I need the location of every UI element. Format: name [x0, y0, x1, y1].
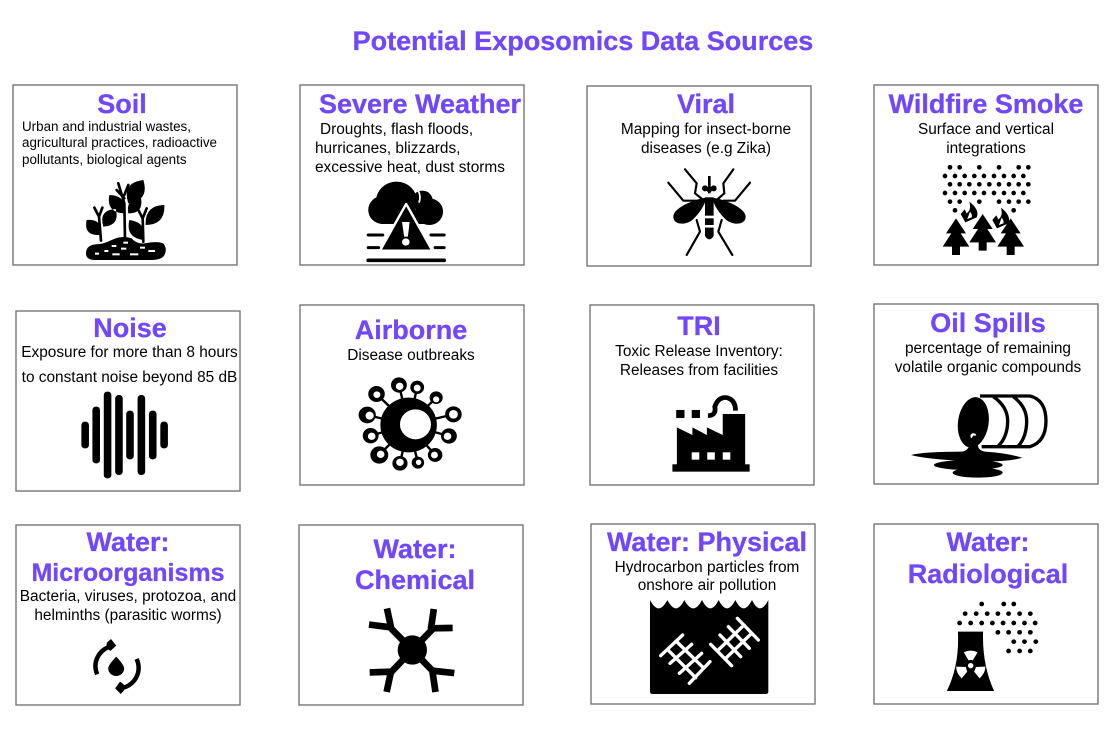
panel: soil [13, 85, 237, 265]
text: water microorganisms description: Bacteria, viruses, protozoa, and [20, 588, 236, 605]
text: airborne description: Disease outbreaks [347, 347, 475, 364]
icon: water cycle [95, 639, 139, 694]
text: wildfire smoke description: integrations [946, 140, 1026, 157]
heading: wildfire smoke: Wildfire Smoke [889, 89, 1083, 119]
heading: noise: Noise [93, 313, 167, 343]
icon: spilled oil barrel [911, 395, 1046, 478]
panel: wildfire smoke [874, 85, 1098, 265]
panel: water microorganisms [16, 525, 240, 705]
text: wildfire smoke description: Surface and vertical [918, 121, 1054, 138]
panel: water chemical [299, 525, 523, 705]
text: soil description: pollutants, biological agents [22, 152, 187, 167]
heading: soil: Soil [97, 89, 147, 119]
text: soil description: Urban and industrial wastes, [22, 119, 191, 134]
icon: plants in soil [86, 180, 166, 260]
text: noise description: to constant noise beyond 85 dB [22, 369, 237, 386]
heading: water chemical: Chemical [355, 565, 475, 595]
text: severe weather description: hurricanes, blizzards, [315, 140, 460, 157]
panel: water radiological [874, 524, 1098, 704]
text: soil description: agricultural practices, radioactive [22, 135, 217, 150]
heading: water radiological: Water: [946, 527, 1030, 557]
heading: severe weather: Severe Weather [319, 89, 522, 119]
text: viral description: diseases (e.g Zika) [641, 140, 771, 157]
text: water microorganisms description: helminths (parasitic worms) [34, 607, 222, 624]
heading: water physical: Water: Physical [607, 527, 807, 557]
text: TRI description: Releases from facilities [620, 362, 778, 379]
panel: TRI [590, 305, 814, 485]
panel: viral [587, 86, 811, 266]
heading: viral: Viral [677, 89, 735, 119]
panel: airborne [300, 305, 524, 485]
text: TRI description: Toxic Release Inventory: [615, 343, 783, 360]
heading: water microorganisms: Water: [86, 527, 170, 557]
icon: sound wave [81, 392, 168, 478]
heading: airborne: Airborne [355, 315, 467, 345]
icon: chemical molecule [372, 612, 451, 689]
icon: smoke over burning trees [943, 165, 1031, 255]
heading: water chemical: Water: [373, 534, 457, 564]
text: severe weather description: excessive heat, dust storms [315, 159, 505, 176]
heading: TRI: TRI [677, 311, 721, 341]
heading: water microorganisms: Microorganisms [31, 559, 225, 587]
icon: nuclear cooling tower [947, 602, 1038, 691]
panel: severe weather [300, 85, 524, 265]
heading: water radiological: Radiological [908, 559, 1068, 589]
icon: storm cloud warning [368, 182, 444, 260]
text: oil spills description: volatile organic compounds [895, 359, 1082, 376]
panel: water physical [591, 524, 815, 704]
text: severe weather description: Droughts, flash floods, [320, 121, 473, 138]
text: viral description: Mapping for insect-borne [621, 121, 791, 138]
icon: mosquito [668, 169, 750, 255]
text: noise description: Exposure for more than 8 hours [21, 344, 238, 361]
icon: virus particle [359, 377, 462, 471]
text: water physical description: Hydrocarbon particles from [615, 559, 799, 576]
title: Potential Exposomics Data Sources [353, 26, 813, 56]
icon: factory [672, 398, 750, 472]
text: water physical description: onshore air pollution [638, 577, 776, 594]
icon: rail tracks under water [650, 600, 768, 694]
panel: oil spills [874, 304, 1098, 484]
heading: oil spills: Oil Spills [930, 308, 1046, 338]
panel: noise [16, 311, 240, 491]
text: oil spills description: percentage of remaining [905, 340, 1071, 357]
